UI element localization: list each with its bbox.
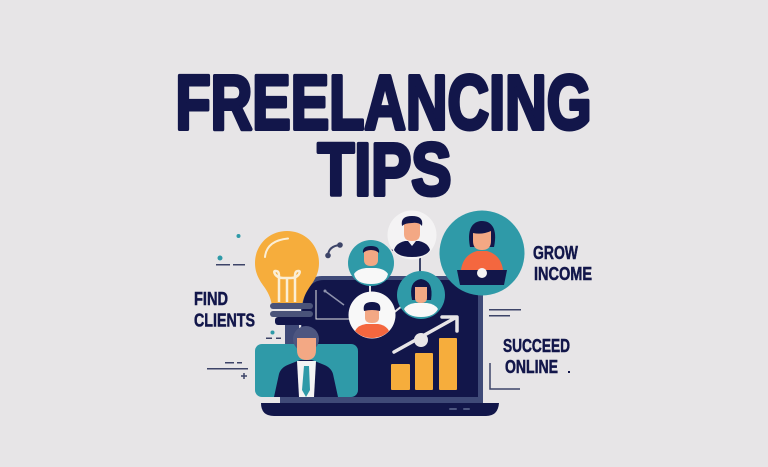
avatar: bottom man	[348, 292, 396, 338]
growth arrow	[394, 317, 457, 352]
laptop screen	[301, 276, 483, 403]
laptop	[261, 276, 499, 416]
screen line chart	[316, 290, 350, 319]
avatar: top man	[388, 210, 436, 260]
icon: link node	[325, 242, 343, 258]
bar chart	[391, 338, 457, 390]
label: grow income	[533, 243, 592, 284]
label: grow income: GROW	[533, 243, 578, 263]
label: grow income: INCOME	[534, 264, 592, 284]
label: find clients	[194, 289, 255, 330]
avatar: left man	[348, 240, 394, 286]
avatar: woman with glasses	[397, 271, 445, 319]
label: find clients: FIND	[194, 289, 228, 309]
light bulb	[255, 231, 319, 345]
decorative marks: left	[207, 234, 281, 379]
laptop base	[261, 403, 499, 416]
title: TIPS	[318, 128, 452, 211]
title	[176, 60, 592, 211]
title: FREELANCING	[176, 60, 592, 146]
label: succeed online: SUCCEED	[503, 336, 570, 356]
avatar: woman at laptop	[440, 210, 524, 296]
person card: man in suit	[255, 326, 358, 397]
label: succeed online: ONLINE	[505, 357, 558, 377]
label: succeed online	[503, 336, 570, 377]
network connectors	[370, 247, 420, 314]
decorative marks: right	[489, 309, 521, 389]
label: find clients: CLIENTS	[194, 310, 255, 330]
